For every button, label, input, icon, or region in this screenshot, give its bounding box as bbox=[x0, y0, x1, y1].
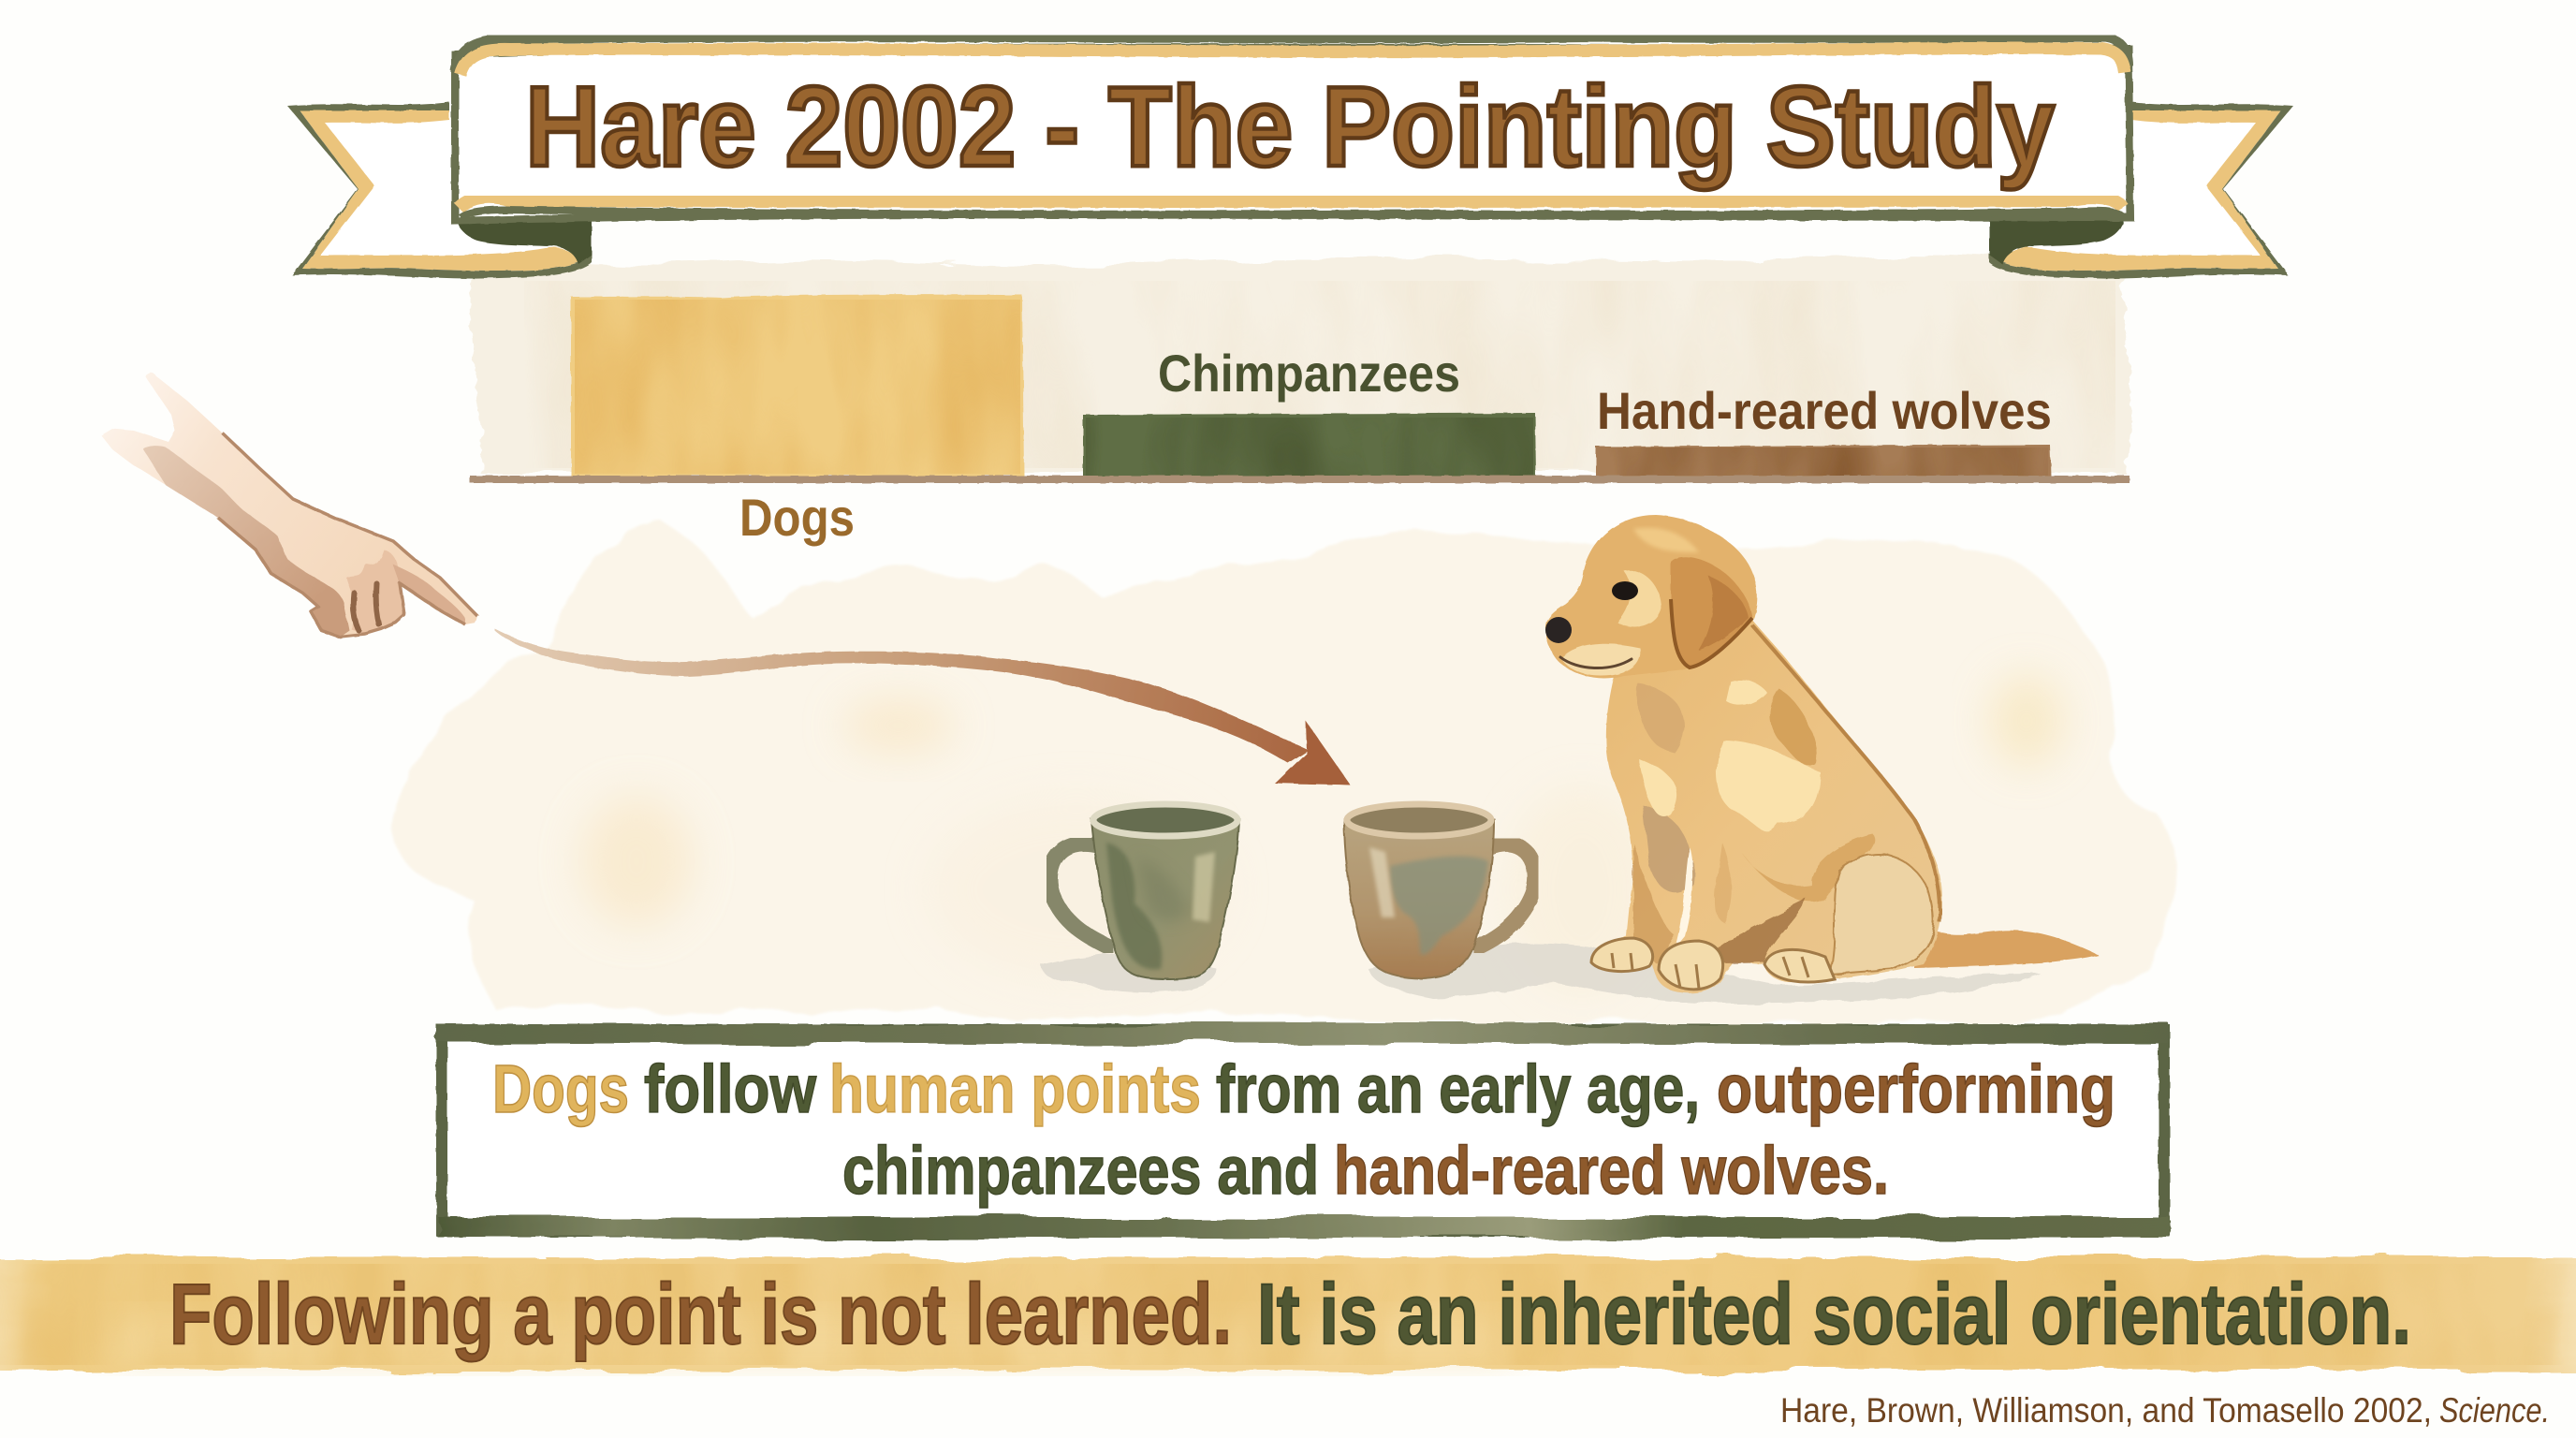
icon: golden retriever puppy bbox=[1545, 515, 2099, 993]
finger gaps bbox=[353, 583, 379, 630]
puppy chest highlight bbox=[1638, 680, 1821, 831]
puppy leg gap bbox=[1676, 847, 1693, 947]
right ribbon fold bbox=[1989, 212, 2124, 264]
label: dogs: Dogs bbox=[739, 488, 855, 547]
index finger shade bbox=[393, 565, 465, 624]
background wash behind scene bbox=[391, 521, 2174, 1027]
left mug highlight bbox=[1193, 852, 1215, 922]
puppy eye bbox=[1612, 581, 1638, 600]
puppy back outline bbox=[1752, 625, 1940, 922]
left ribbon fold bbox=[457, 212, 592, 264]
band texture bbox=[0, 1264, 2576, 1365]
arm and hand silhouette bbox=[101, 373, 477, 637]
title ribbon banner bbox=[287, 37, 2293, 279]
caption line one: human points bbox=[829, 1052, 1201, 1127]
chart background wash bbox=[471, 255, 2131, 473]
caption line two bbox=[842, 1134, 1889, 1209]
puppy tail bbox=[1914, 922, 2099, 968]
right mug green patch bbox=[1390, 857, 1488, 955]
ribbon main body bbox=[455, 47, 2130, 221]
chart baseline bbox=[470, 476, 2130, 483]
label: chimpanzees: Chimpanzees bbox=[1158, 344, 1460, 403]
puppy paws bbox=[1591, 938, 1835, 990]
right mug body bbox=[1344, 819, 1494, 978]
right mug rim bbox=[1347, 804, 1491, 836]
citation: Science. bbox=[2439, 1391, 2550, 1430]
puppy mouth bbox=[1560, 657, 1632, 668]
icon: pointing hand bbox=[101, 373, 477, 637]
caption line one: from an early age, bbox=[1216, 1052, 1700, 1127]
arrow head bbox=[1275, 721, 1351, 785]
puppy haunch bbox=[1830, 855, 1934, 974]
caption line two: hand-reared wolves. bbox=[1334, 1134, 1889, 1209]
finger patches bbox=[346, 550, 404, 634]
left mug dark patch bbox=[1106, 843, 1162, 970]
left ribbon tail bbox=[287, 102, 592, 279]
right mug handle bbox=[1477, 844, 1535, 947]
chart texture bbox=[524, 281, 2115, 468]
bar: chimpanzees bbox=[1083, 413, 1536, 477]
citation: Hare, Brown, Williamson, and Tomasello 2002, bbox=[1780, 1391, 2432, 1430]
puppy ear outline bbox=[1671, 599, 1752, 668]
caption bottom band bbox=[438, 1217, 2170, 1238]
arrow from hand to cup bbox=[495, 629, 1351, 785]
caption frame bbox=[442, 1030, 2164, 1231]
puppy brow highlight bbox=[1617, 570, 1661, 627]
caption line two: chimpanzees and bbox=[842, 1134, 1319, 1209]
caption line one: follow bbox=[644, 1052, 817, 1127]
band center glow bbox=[112, 1320, 1516, 1357]
puppy head bbox=[1545, 515, 1757, 679]
icon: right mug bbox=[1344, 804, 1535, 978]
ribbon top edge bands bbox=[455, 37, 2129, 75]
icon: left mug bbox=[1050, 804, 1239, 979]
hand outline bbox=[218, 433, 477, 637]
left mug rim bbox=[1093, 804, 1237, 836]
band wash bbox=[0, 1257, 2576, 1370]
puppy head highlight bbox=[1633, 528, 1699, 552]
bar chart: pointing performance bbox=[470, 255, 2131, 547]
bar: hand-reared wolves bbox=[1596, 445, 2051, 477]
puppy ear shade bbox=[1699, 576, 1749, 651]
puppy muzzle highlight bbox=[1561, 644, 1640, 676]
takeaway part one: Following a point is not learned. bbox=[169, 1267, 1232, 1362]
takeaway band bbox=[0, 1257, 2576, 1370]
label: hand-reared wolves: Hand-reared wolves bbox=[1597, 381, 2052, 440]
caption line one: outperforming bbox=[1717, 1052, 2115, 1127]
right ribbon tail bbox=[1989, 102, 2293, 279]
bar: dogs bbox=[571, 295, 1024, 476]
arrow shaft bbox=[495, 629, 1309, 763]
caption box bbox=[438, 1024, 2170, 1238]
caption line one: Dogs bbox=[492, 1052, 629, 1127]
floor shadows bbox=[1041, 944, 2041, 1004]
left mug body bbox=[1091, 819, 1239, 979]
arm shadow bbox=[143, 447, 349, 637]
puppy ear bbox=[1671, 557, 1752, 668]
left mug green patch bbox=[1137, 857, 1189, 921]
ribbon bottom edge bands bbox=[459, 197, 2123, 217]
puppy nose bbox=[1545, 617, 1572, 643]
title: Hare 2002 - The Pointing Study bbox=[525, 63, 2055, 190]
puppy body bbox=[1591, 599, 1942, 993]
cups and puppy scene bbox=[1041, 515, 2099, 1004]
puppy fur shading bbox=[1633, 683, 1916, 964]
left mug handle bbox=[1050, 844, 1110, 947]
caption top band bbox=[438, 1024, 2170, 1044]
caption line one bbox=[492, 1052, 2115, 1127]
right mug highlight bbox=[1369, 847, 1395, 917]
